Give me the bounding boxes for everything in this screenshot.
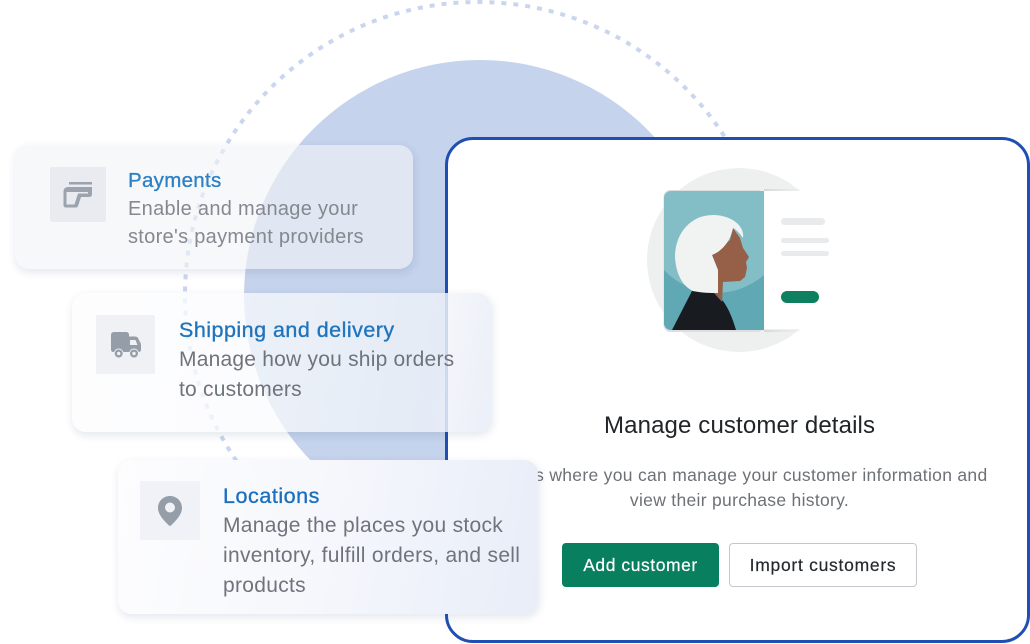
text block: description: view their purchase history.: [630, 490, 849, 510]
heading: manage customer details: Manage customer details: [604, 412, 875, 439]
text: payments description: Enable and manage your: [128, 198, 358, 220]
button: import customers: Import customers: [750, 555, 896, 575]
icon: payments: [50, 167, 106, 222]
text: locations description: products: [223, 574, 306, 597]
text: locations description: Manage the places you stock: [223, 514, 503, 537]
text: payments description: store's payment providers: [128, 226, 364, 248]
icon: location pin: [140, 481, 200, 540]
text block: description: [492, 465, 987, 510]
text: shipping description: Manage how you ship orders: [179, 348, 454, 371]
panel: shipping card: [72, 293, 491, 432]
text: payments description: [128, 198, 364, 248]
text: shipping description: to customers: [179, 378, 302, 401]
panel border seen through card: [445, 293, 448, 432]
button: add customer: Add customer: [583, 555, 698, 575]
panel: payments card: [15, 145, 413, 269]
panel: locations card: [118, 460, 538, 614]
panel: manage customer details: [445, 137, 1030, 643]
button: import customers: [729, 543, 917, 587]
text: locations description: inventory, fulfill orders, and sell: [223, 544, 520, 567]
heading: locations: Locations: [223, 484, 320, 508]
icon: truck: [96, 315, 155, 374]
button: add customer: [562, 543, 719, 587]
illustration: customer profile: [647, 168, 829, 352]
heading: shipping and delivery: Shipping and delivery: [179, 318, 395, 342]
text: locations description: [223, 514, 520, 597]
text block: description: This is where you can manage your customer information and: [492, 465, 987, 485]
heading: payments: Payments: [128, 169, 222, 192]
text: shipping description: [179, 348, 454, 401]
